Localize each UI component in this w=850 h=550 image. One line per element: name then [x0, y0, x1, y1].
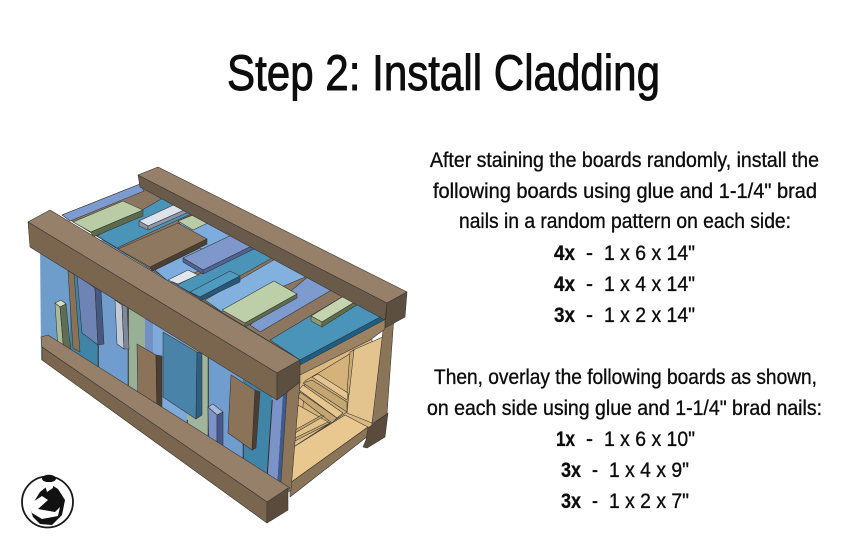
white raised board — [139, 202, 189, 230]
text block: first instructions: - — [586, 241, 593, 265]
text block: first instructions: - — [586, 303, 593, 327]
bottom rail — [41, 335, 290, 523]
right corner post — [372, 316, 394, 424]
brown wide board — [137, 344, 162, 418]
text block: overlay instructions: on each side using glue and 1-1/4" brad nails: — [427, 396, 822, 420]
panel: right opening interior — [290, 336, 385, 497]
text block: overlay instructions: 3x — [561, 489, 581, 513]
text block: overlay instructions: 3x — [561, 458, 581, 482]
front top rail — [28, 210, 300, 400]
text block: first instructions: 3x — [554, 303, 575, 327]
text block: overlay instructions: - — [586, 427, 593, 451]
text block: first instructions: After staining the boards randomly, install the — [430, 148, 819, 172]
text block: overlay instructions: 1 x 6 x 10" — [604, 427, 695, 451]
periwinkle raised board — [183, 232, 258, 274]
icon: logo woodworker with crossed arms — [22, 475, 73, 528]
text block: first instructions: nails in a random pattern on each side: — [459, 209, 791, 233]
sage board large back — [73, 201, 143, 237]
back top rail — [138, 167, 407, 328]
periwinkle short board — [208, 404, 223, 460]
text block: first instructions: 1 x 4 x 14" — [604, 272, 695, 296]
illustration: clad crate — [28, 167, 407, 523]
panel: front side cladding base boards — [40, 240, 287, 510]
brown hanging board — [228, 375, 260, 450]
sage small raised board — [311, 291, 363, 327]
text block: first instructions: following boards using glue and 1-1/4" brad — [433, 179, 817, 203]
text block: first instructions — [430, 148, 819, 327]
text block: overlay instructions: 1 x 2 x 7" — [609, 489, 689, 513]
sage board small back — [178, 213, 212, 230]
text block: first instructions: 1 x 6 x 14" — [604, 241, 695, 265]
end block right — [363, 413, 388, 448]
text block: overlay instructions — [427, 365, 822, 513]
text block: first instructions: - — [586, 272, 593, 296]
periwinkle board — [77, 275, 104, 345]
sage large raised board — [222, 281, 297, 327]
text block: first instructions: 4x — [554, 272, 575, 296]
board seams — [98, 290, 272, 490]
text block: overlay instructions: - — [592, 458, 598, 482]
deep blue board — [163, 332, 202, 419]
text block: overlay instructions: 1x — [556, 427, 575, 451]
white board — [115, 300, 129, 349]
corner post at opening — [280, 382, 300, 497]
title: Step 2: Install Cladding — [227, 45, 660, 101]
brown post — [68, 271, 80, 352]
panel: top deck boards — [62, 184, 386, 365]
text block: first instructions: 4x — [554, 241, 575, 265]
text block: overlay instructions: - — [592, 489, 598, 513]
brown wide raised board — [118, 223, 207, 271]
sage thin board — [55, 300, 71, 354]
text block: overlay instructions: 1 x 4 x 9" — [609, 458, 689, 482]
overlay boards on side — [55, 271, 260, 460]
teal raised board — [190, 271, 240, 301]
under-deck band — [298, 318, 385, 375]
text block: first instructions: 1 x 2 x 14" — [604, 303, 695, 327]
